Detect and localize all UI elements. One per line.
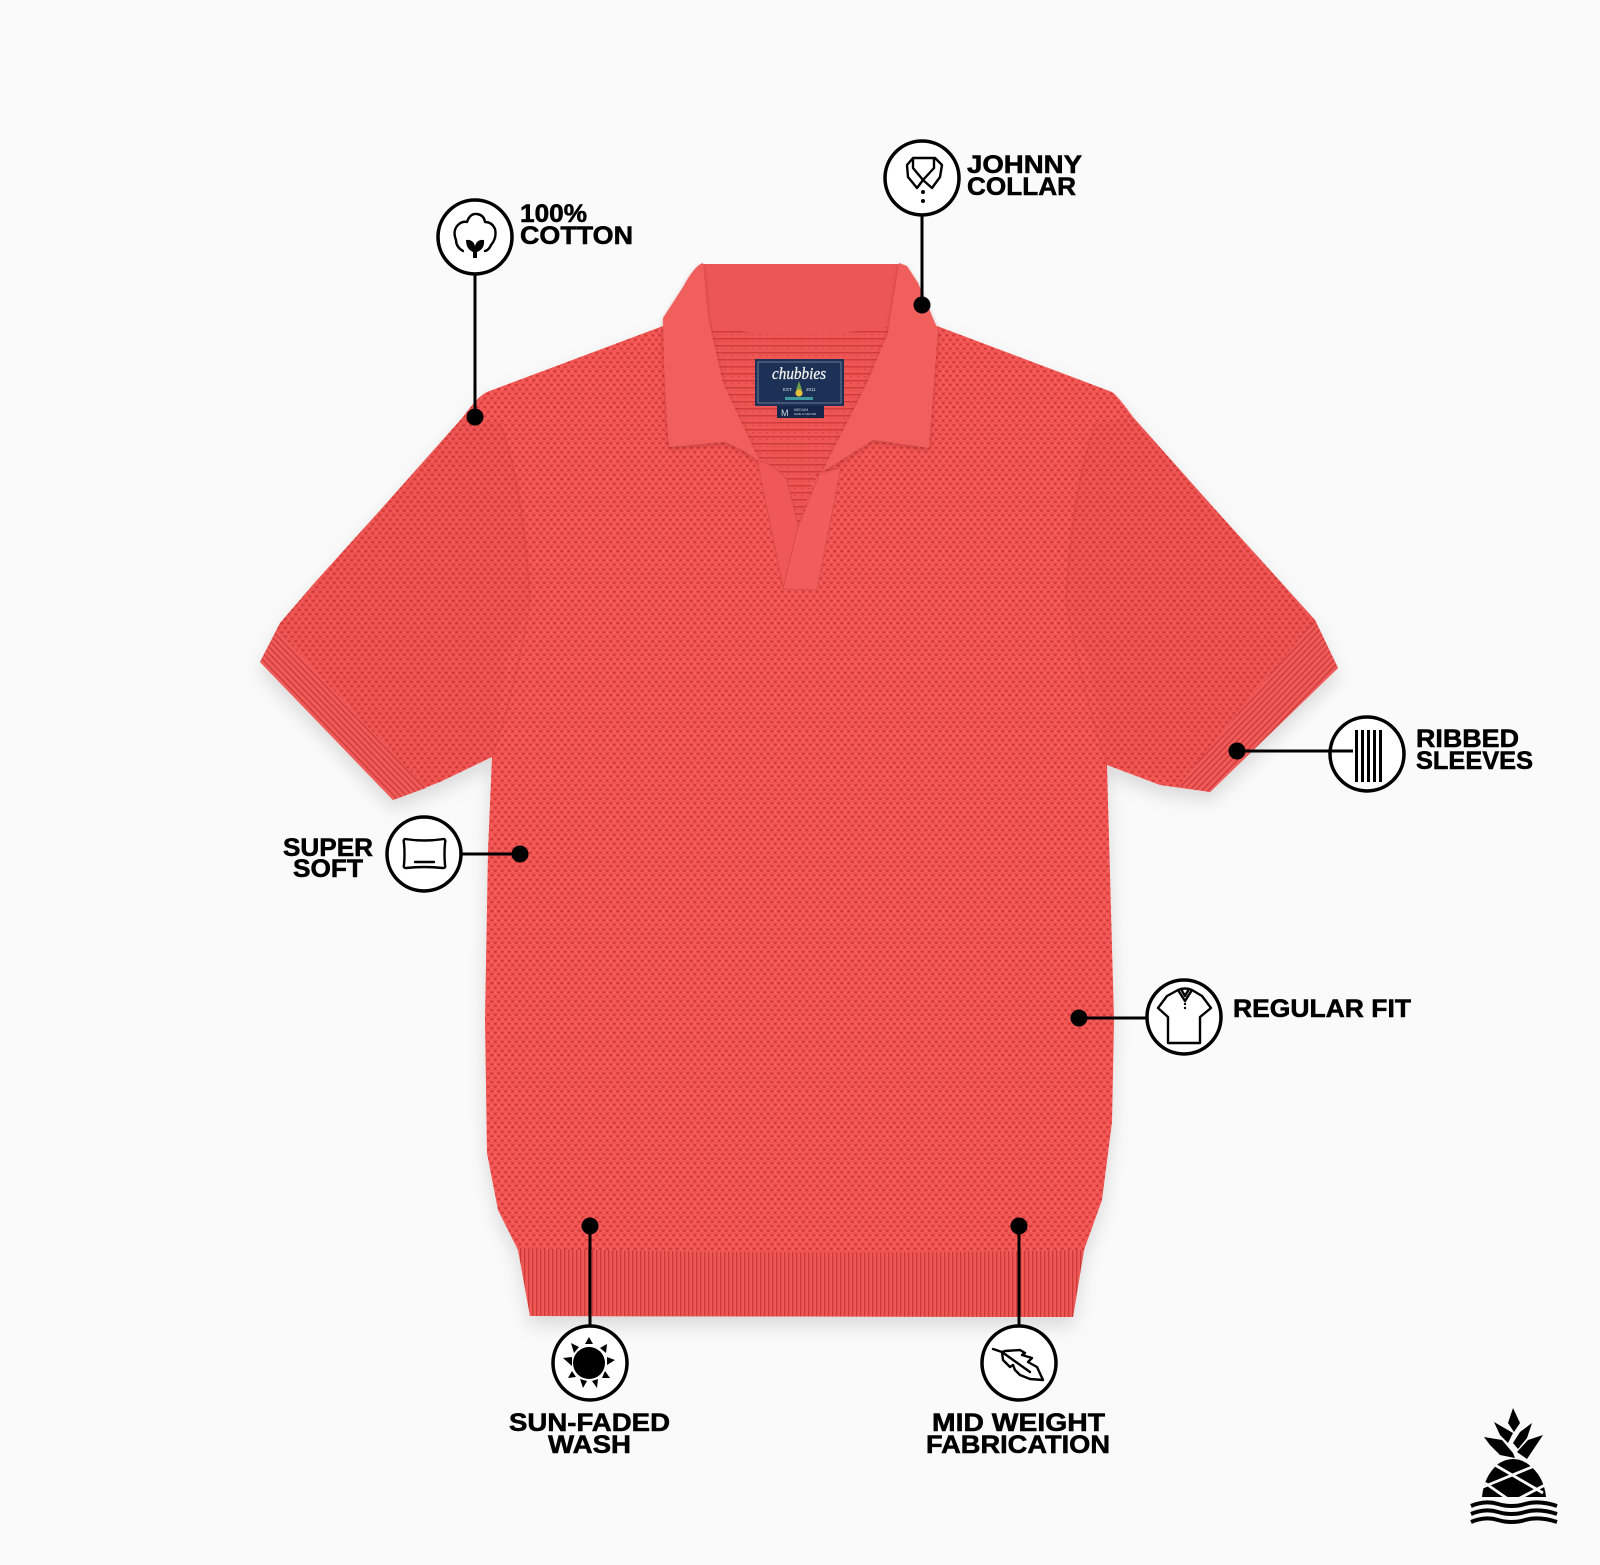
icon: cotton boll [455, 214, 496, 258]
callout: johnny collar: COLLAR [967, 173, 1076, 201]
callout: mid weight fabrication: FABRICATION [926, 1431, 1110, 1459]
neck label: 2011 [806, 387, 816, 392]
neck label [755, 359, 844, 418]
collar stand [700, 264, 902, 335]
icon: pineapple logo [1471, 1408, 1557, 1522]
callout: johnny collar: JOHNNY [967, 151, 1082, 179]
right placket [783, 468, 841, 590]
right cuff [1178, 620, 1338, 792]
callout: super soft [283, 817, 528, 891]
callout: regular fit [1070, 980, 1411, 1054]
callout: ribbed sleeves: SLEEVES [1416, 747, 1533, 775]
left collar [663, 263, 760, 462]
callout: 100% cotton: COTTON [520, 222, 633, 250]
callout: 100% cotton [438, 200, 633, 426]
hem band [518, 1248, 1084, 1317]
icon: ribs [1355, 730, 1382, 782]
icon: pillow [404, 839, 445, 868]
icon: collar [907, 158, 942, 203]
neck label: MEDIUM [794, 408, 808, 412]
shirt body and sleeves [260, 326, 1338, 1317]
neck interior [700, 300, 900, 528]
callout: ribbed sleeves [1228, 717, 1533, 791]
callout: super soft: SUPER [283, 834, 373, 862]
neck label: M [781, 408, 788, 418]
right collar [822, 263, 938, 472]
icon: sun [563, 1337, 615, 1388]
left sleeve shading [260, 417, 530, 800]
icon: feather [993, 1349, 1043, 1380]
callout: sun-faded wash [509, 1218, 670, 1459]
neck label: chubbies [772, 364, 826, 383]
callout: sun-faded wash: WASH [548, 1431, 631, 1459]
neck label: MADE IN VIETNAM [794, 413, 816, 416]
icon: polo shirt [1158, 988, 1211, 1043]
callout: sun-faded wash: SUN-FADED [509, 1409, 670, 1437]
callout: 100% cotton: 100% [520, 200, 587, 228]
callout: super soft: SOFT [293, 855, 363, 883]
polo shirt [260, 263, 1338, 1317]
callout: mid weight fabrication: MID WEIGHT [932, 1409, 1105, 1437]
neck label: EST. [783, 387, 793, 392]
left cuff [260, 630, 426, 800]
callout: ribbed sleeves: RIBBED [1416, 725, 1519, 753]
left placket [757, 460, 798, 588]
right sleeve shading [1066, 417, 1338, 792]
callout: johnny collar [885, 141, 1082, 314]
callout: mid weight fabrication [926, 1218, 1110, 1459]
side seams [492, 423, 1107, 765]
callout: regular fit: REGULAR FIT [1233, 995, 1411, 1023]
